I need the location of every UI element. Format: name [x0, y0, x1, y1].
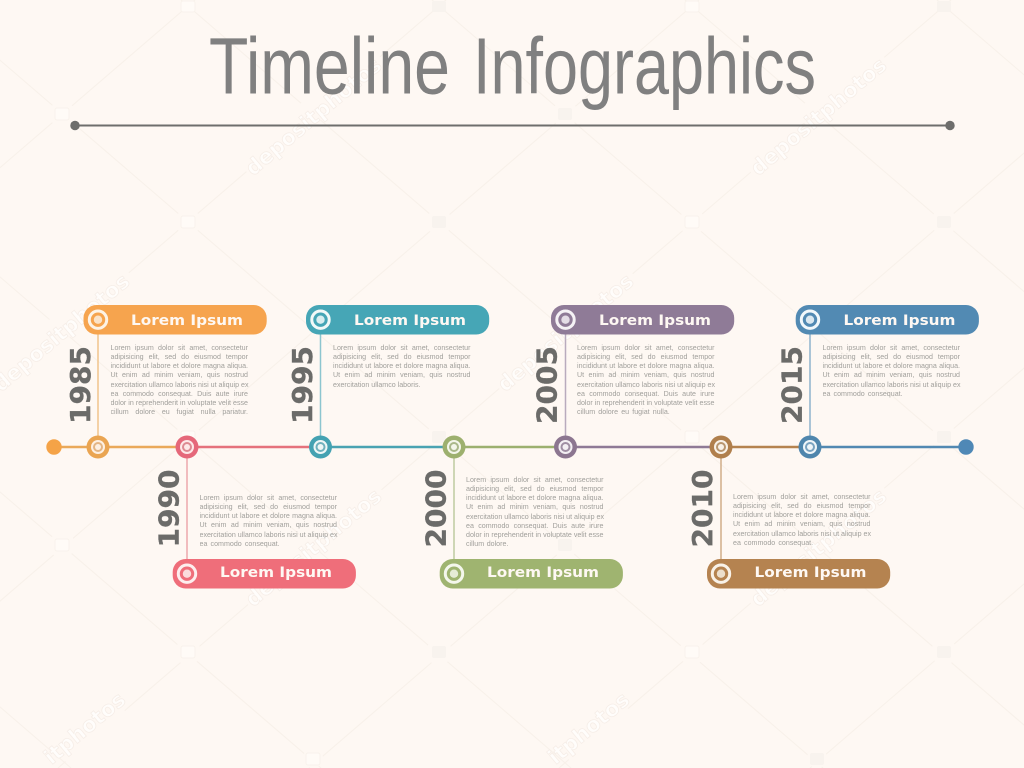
body text 2005: exercitation ullamco laboris nisi ut aliquip ex: [577, 380, 715, 388]
title: Infographics: [473, 22, 816, 110]
milestone 2005: [530, 305, 734, 458]
body text 2000: Lorem ipsum dolor sit amet, consectetur: [466, 476, 604, 484]
body text 1985: [110, 344, 250, 424]
body text 2010: exercitation ullamco laboris nisi ut aliquip ex: [733, 530, 871, 538]
body text 1985: incididunt ut labore et dolore magna aliqua.: [110, 362, 248, 370]
label pill 2005: Lorem Ipsum: [599, 312, 711, 329]
body text 2010: ea commodo consequat.: [733, 539, 813, 547]
body text 2010: incididunt ut labore et dolore magna aliqua.: [733, 511, 870, 519]
title: Timeline: [209, 22, 450, 110]
body text 2000: ea commodo consequat. Duis aute irure: [466, 522, 604, 530]
node 2000: [442, 436, 466, 458]
body text 1990: incididunt ut labore et dolore magna aliqua.: [200, 512, 337, 520]
body text 2010: adipisicing elit, sed do eiusmod tempor: [733, 502, 870, 510]
year 2005: 2005: [530, 346, 564, 424]
body text 2005: adipisicing elit, sed do eiusmod tempor: [577, 353, 714, 361]
label pill 2005: [551, 305, 734, 334]
node 2015: [798, 436, 822, 458]
node 1985: [86, 436, 110, 458]
body text 1985: cillum dolore eu fugiat nulla pariatur.: [110, 408, 248, 416]
title: [209, 22, 816, 110]
body text 2005: ea commodo consequat. Duis aute irure: [577, 390, 714, 398]
watermarks: depositphotos: [493, 269, 638, 396]
label pill 2000: Lorem Ipsum: [487, 564, 599, 581]
body text 2000: Ut enim ad minim veniam, quis nostrud: [466, 503, 604, 511]
body text 2005: cillum dolore eu fugiat nulla.: [577, 408, 670, 416]
milestone 1990: [152, 436, 356, 588]
label pill 2015: Lorem Ipsum: [844, 312, 956, 329]
label pill 1990: [173, 559, 356, 588]
node 1995: [309, 436, 332, 458]
label pill 1985: Lorem Ipsum: [131, 312, 243, 329]
body text 2015: ea commodo consequat.: [822, 390, 903, 398]
label pill 2010: Lorem Ipsum: [754, 564, 866, 581]
year 2000: 2000: [420, 470, 452, 548]
body text 2000: incididunt ut labore et dolore magna aliqua.: [466, 494, 604, 502]
body text 1995: [333, 344, 472, 404]
timeline end dot: [958, 439, 974, 455]
body text 2000: exercitation ullamco laboris nisi ut aliquip ex: [466, 512, 604, 520]
node 2005: [554, 436, 577, 458]
body text 1995: adipisicing elit, sed do eiusmod tempor: [333, 353, 470, 361]
body text 1985: adipisicing elit, sed do eiusmod tempor: [110, 353, 248, 361]
body text 2015: Ut enim ad minim veniam, quis nostrud: [822, 371, 960, 379]
body text 1995: Lorem ipsum dolor sit amet, consectetur: [333, 344, 470, 352]
title rule: [70, 121, 955, 130]
milestone 1995: [286, 305, 489, 458]
body text 1985: Ut enim ad minim veniam, quis nostrud: [110, 371, 248, 379]
body text 2015: Lorem ipsum dolor sit amet, consectetur: [822, 344, 960, 352]
body text 2000: dolor in reprehenderit in voluptate velit esse: [466, 531, 604, 539]
body text 1990: exercitation ullamco laboris nisi ut aliquip ex: [200, 530, 338, 538]
watermarks: depositphotos: [241, 53, 386, 180]
body text 1990: adipisicing elit, sed do eiusmod tempor: [200, 503, 337, 511]
body text 2005: incididunt ut labore et dolore magna aliqua.: [577, 362, 714, 370]
body text 1990: ea commodo consequat.: [200, 540, 280, 548]
watermarks: itphotos: [39, 687, 130, 768]
year 2010: 2010: [686, 470, 719, 548]
body text 2000: cillum dolore.: [466, 540, 508, 548]
body text 1995: incididunt ut labore et dolore magna aliqua.: [333, 362, 470, 370]
timeline start dot: [46, 439, 62, 455]
body text 2000: adipisicing elit, sed do eiusmod tempor: [466, 485, 604, 493]
milestone 2010: [686, 436, 890, 588]
body text 2015: exercitation ullamco laboris nisi ut aliquip ex: [822, 380, 961, 388]
body text 2005: [577, 344, 716, 424]
body text 2015: [822, 344, 962, 404]
timeline axis: [54, 446, 966, 448]
year 1985: 1985: [64, 346, 97, 424]
label pill 1990: Lorem Ipsum: [220, 564, 332, 581]
milestone 1985: [64, 305, 267, 458]
label pill 1995: Lorem Ipsum: [354, 312, 466, 329]
body text 1995: Ut enim ad minim veniam, quis nostrud: [333, 371, 470, 379]
year 1990: 1990: [152, 470, 186, 548]
year 2015: 2015: [776, 346, 808, 424]
body text 2005: Ut enim ad minim veniam, quis nostrud: [577, 371, 714, 379]
node 2010: [710, 436, 732, 458]
year 1995: 1995: [286, 346, 319, 424]
watermarks: depositphotos: [746, 484, 891, 611]
node 1990: [176, 436, 198, 458]
watermarks: depositphotos: [746, 53, 891, 180]
body text 1995: exercitation ullamco laboris.: [333, 380, 421, 388]
label pill 2000: [440, 559, 623, 588]
body text 1985: ea commodo consequat. Duis aute irure: [110, 390, 248, 398]
label pill 2015: [796, 305, 979, 334]
body text 1985: Lorem ipsum dolor sit amet, consectetur: [110, 344, 248, 352]
label pill 1985: [84, 305, 267, 334]
watermarks: itphotos: [543, 687, 634, 768]
body text 2010: Ut enim ad minim veniam, quis nostrud: [733, 520, 870, 528]
body text 2015: adipisicing elit, sed do eiusmod tempor: [822, 353, 960, 361]
body text 1990: Ut enim ad minim veniam, quis nostrud: [200, 521, 337, 529]
body text 2010: [733, 493, 872, 553]
body text 2005: dolor in reprehenderit in voluptate velit esse: [577, 399, 714, 407]
label pill 1995: [306, 305, 489, 334]
body text 1985: exercitation ullamco laboris nisi ut aliquip ex: [110, 380, 249, 388]
body text 1990: [200, 494, 338, 554]
label pill 2010: [707, 559, 890, 588]
body text 2015: incididunt ut labore et dolore magna aliqua.: [822, 362, 960, 370]
body text 2010: Lorem ipsum dolor sit amet, consectetur: [733, 493, 870, 501]
body text 2005: Lorem ipsum dolor sit amet, consectetur: [577, 344, 714, 352]
body text 2000: [466, 476, 605, 556]
milestone 2015: [776, 305, 979, 458]
watermarks: depositphotos: [241, 484, 386, 611]
body text 1990: Lorem ipsum dolor sit amet, consectetur: [200, 494, 337, 502]
body text 1985: dolor in reprehenderit in voluptate velit esse: [110, 399, 248, 407]
milestone 2000: [420, 436, 623, 588]
